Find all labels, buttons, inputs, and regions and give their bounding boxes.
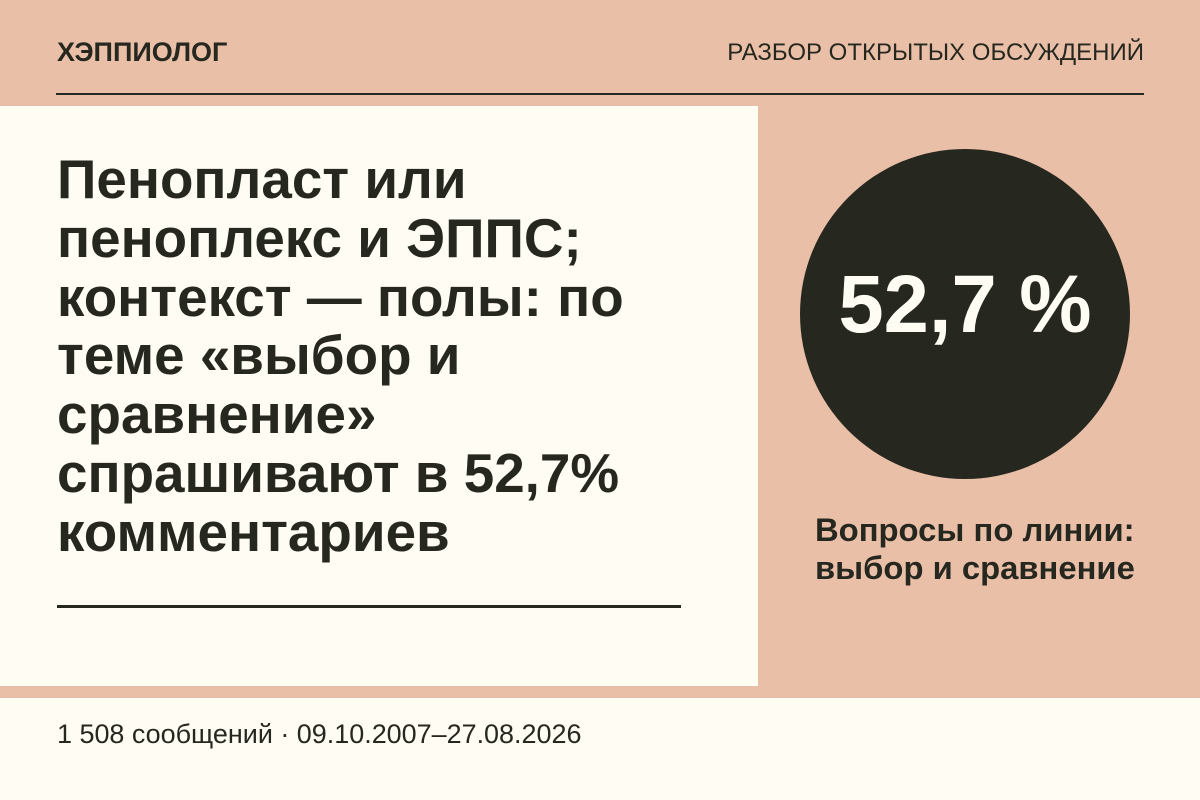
heading: контекст — полы: по xyxy=(57,266,624,328)
heading: теме «выбор и xyxy=(57,324,460,386)
header rule xyxy=(56,93,1144,95)
footer text: 1 508 сообщений · 09.10.2007–27.08.2026 xyxy=(57,719,581,749)
header brand: ХЭППИОЛОГ xyxy=(57,37,227,67)
stat value: 52,7 % xyxy=(838,259,1092,350)
panel: headline xyxy=(0,106,758,686)
heading underline xyxy=(57,605,681,608)
stat caption xyxy=(815,511,1135,586)
stat circle xyxy=(800,149,1130,479)
heading: Пенопласт или xyxy=(57,148,467,210)
heading: сравнение» xyxy=(57,383,376,445)
header subtitle: РАЗБОР ОТКРЫТЫХ ОБСУЖДЕНИЙ xyxy=(727,39,1144,66)
heading: пеноплекс и ЭППС; xyxy=(57,207,582,269)
footer band xyxy=(0,698,1200,800)
heading: комментариев xyxy=(57,500,450,562)
stat caption: Вопросы по линии: xyxy=(815,511,1135,548)
heading: спрашивают в 52,7% xyxy=(57,442,619,504)
stat caption: выбор и сравнение xyxy=(815,549,1135,586)
heading xyxy=(57,148,624,562)
